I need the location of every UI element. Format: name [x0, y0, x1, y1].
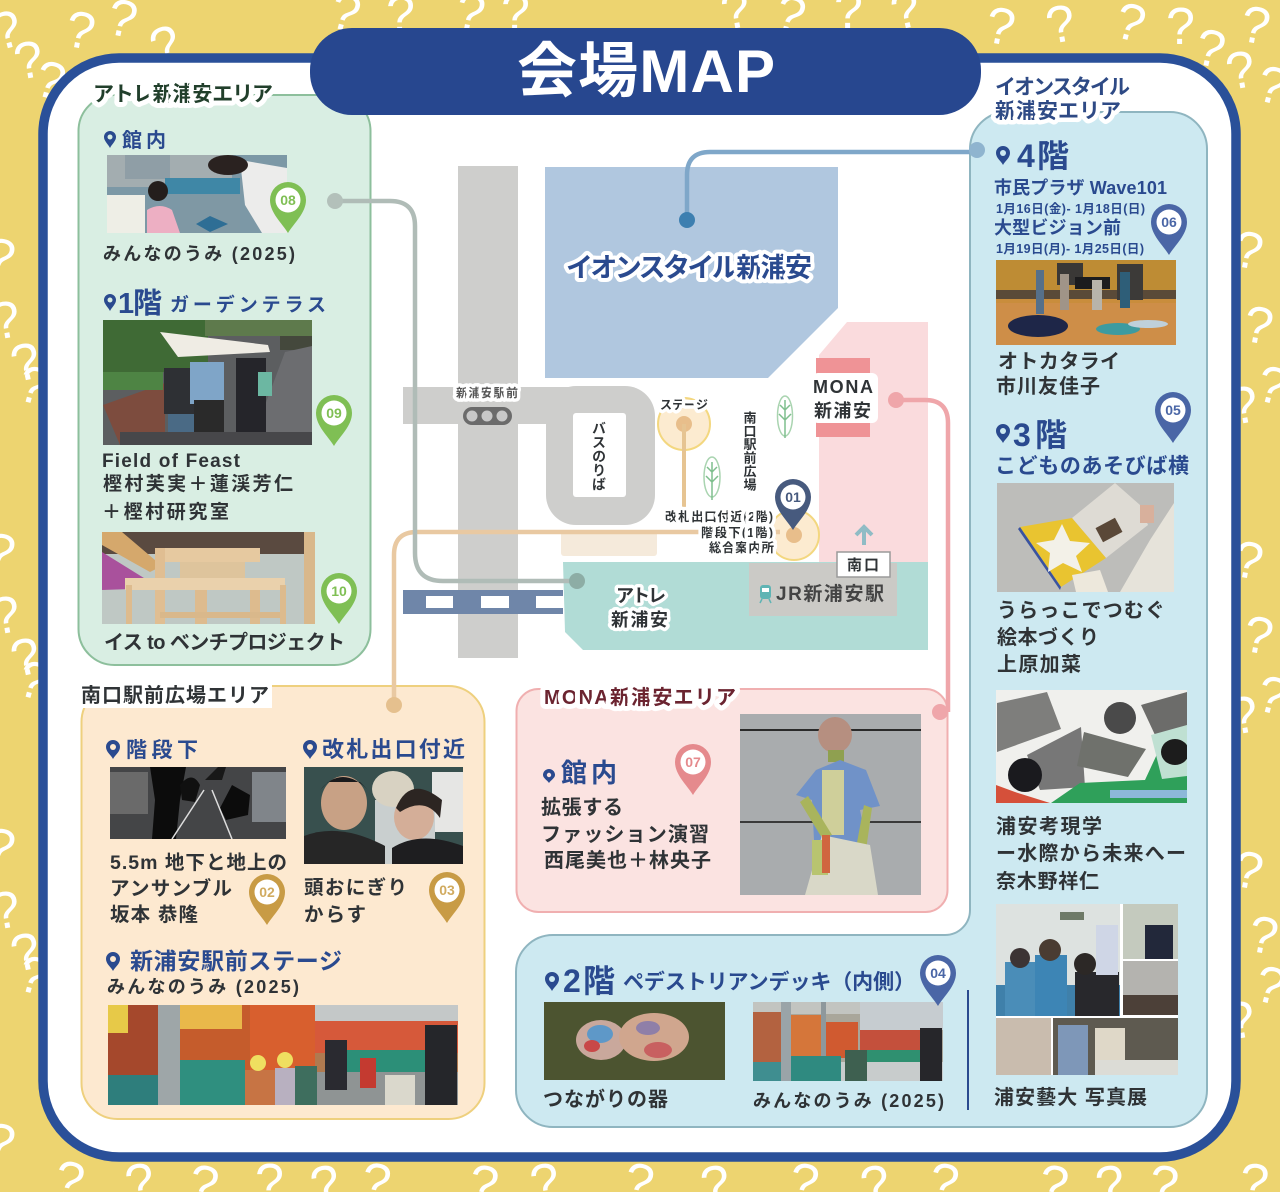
area heading: 南口駅前広場エリア [81, 684, 269, 707]
information labels [665, 509, 774, 555]
divider [967, 990, 969, 1110]
caption: 奈木野祥仁 [996, 870, 1099, 893]
caption: 坂本 恭隆 [110, 904, 198, 926]
area heading: MONA新浦安エリア [544, 686, 736, 709]
bus stop label [573, 413, 626, 497]
pin 04 [920, 955, 956, 1006]
caption: 浦安考現学 [996, 815, 1102, 838]
photo: bowls [544, 1002, 725, 1080]
background question marks: ? [1221, 40, 1260, 102]
caption: 上原加菜 [997, 653, 1081, 676]
atre building [563, 562, 928, 650]
panel: south plaza area [78, 680, 484, 1119]
pin 08: 08 [280, 192, 296, 208]
title banner [310, 28, 981, 115]
caption: アンサンブル [110, 877, 232, 900]
photo: otokatarai [996, 260, 1176, 345]
caption: 浦安藝大 写真展 [994, 1086, 1147, 1109]
venue details: 1月19日(月)- 1月25日(日) [996, 242, 1144, 256]
panel: atre area [78, 83, 370, 665]
caption: からす [304, 904, 366, 926]
pin 02: 02 [259, 884, 275, 900]
pin 03: 03 [439, 882, 455, 898]
caption [110, 852, 287, 926]
floor heading: indoors: 館内 [122, 129, 166, 152]
background question marks: ? [1229, 220, 1268, 282]
plaza patch [561, 530, 657, 556]
pin 06 [1151, 204, 1187, 255]
pin 01: 01 [785, 489, 801, 505]
caption: Field of Feast [102, 451, 241, 472]
background question marks: ? [1190, 18, 1230, 80]
caption [541, 796, 711, 872]
caption [102, 451, 293, 523]
background question marks: ? [1229, 840, 1268, 902]
photo: sea painting deck [753, 1002, 943, 1081]
heading: 3F: 3階 [1013, 417, 1067, 453]
heading: gate: 改札出口付近 [322, 737, 465, 762]
photo: sea painting wall [108, 1005, 458, 1105]
pin 10: 10 [331, 583, 347, 599]
caption: みんなのうみ (2025) [753, 1091, 944, 1111]
connector: stage [682, 424, 686, 511]
train icon [760, 585, 771, 603]
pin 07 [675, 744, 711, 795]
information labels: 改札出口付近(2階) [665, 509, 773, 524]
caption: 絵本づくり [997, 626, 1099, 649]
caption [996, 815, 1186, 893]
background question marks: ? [1224, 375, 1263, 437]
background question marks: ? [9, 30, 48, 92]
caption: オトカタライ [998, 350, 1120, 373]
stage label: ステージ [660, 398, 708, 412]
area heading: アトレ新浦安エリア [93, 83, 273, 106]
heading: 3F: こどものあそびば横 [995, 455, 1189, 478]
pin 10 [321, 573, 357, 624]
map [327, 142, 985, 720]
venue details: 市民プラザ Wave101 [994, 178, 1167, 198]
information labels: 総合案内所 [709, 540, 774, 555]
photo: sea painting [107, 155, 287, 233]
pin 08 [270, 182, 306, 233]
caption: イス to ベンチプロジェクト [104, 631, 345, 654]
floor heading: 1F [104, 288, 326, 320]
vertical road [458, 166, 518, 658]
photo: urayasu archaeology [996, 690, 1189, 803]
connector: mona [888, 392, 948, 720]
atre label: 新浦安 [611, 609, 668, 630]
aeon building [545, 167, 838, 378]
pin 06: 06 [1161, 214, 1177, 230]
tree [704, 457, 720, 500]
heading: stage: 新浦安駅前ステージ [130, 948, 342, 974]
pin 09: 09 [326, 405, 342, 421]
caption [304, 876, 407, 926]
title: 会場MAP [517, 38, 775, 105]
JR station label: JR新浦安駅 [776, 583, 884, 605]
caption: 市川友佳子 [996, 375, 1100, 398]
caption: 樫村芙実＋蓮渓芳仁 [103, 472, 293, 495]
venue details: 大型ビジョン前 [994, 217, 1121, 238]
floor heading: 1F: ガーデンテラス [170, 293, 326, 316]
area heading: 新浦安エリア [995, 100, 1121, 123]
caption [996, 350, 1120, 398]
heading: stairs: 階段下 [126, 739, 198, 762]
background question marks: ? [1224, 685, 1263, 747]
heading: 3F [995, 417, 1189, 478]
aeon label: イオンスタイル新浦安 [566, 253, 812, 283]
mona label: 新浦安 [814, 400, 871, 421]
caption: みんなのうみ (2025) [103, 244, 295, 264]
venue details [994, 178, 1167, 256]
area heading: イオンスタイル [995, 76, 1130, 99]
pin 07: 07 [685, 754, 701, 770]
background question marks: ? [12, 354, 55, 418]
south exit [837, 552, 890, 577]
pin 02 [249, 874, 285, 925]
background question marks: ? [1239, 605, 1278, 667]
heading: indoors: 館内 [561, 758, 617, 788]
caption: 頭おにぎり [304, 876, 407, 899]
photo: rice ball [304, 767, 463, 864]
connector: atre [327, 193, 585, 589]
caption: ＋樫村研究室 [102, 501, 229, 523]
information labels: 階段下(1階) [701, 526, 773, 540]
atre label [611, 586, 668, 630]
background question marks: ? [12, 649, 55, 713]
connector: aeon [679, 142, 985, 228]
caption: 西尾美也＋林央子 [544, 849, 711, 872]
station road label: 新浦安駅前 [456, 385, 518, 400]
panel: mona area [516, 686, 948, 912]
mona label: MONA [813, 377, 873, 397]
mona accents [816, 358, 870, 437]
tree [778, 396, 792, 438]
heading: 4F: 4階 [1017, 138, 1069, 174]
pin 09 [316, 395, 352, 446]
pin 01 [775, 479, 811, 530]
information circle [769, 510, 819, 560]
arrow up [856, 527, 872, 545]
photo: picture book [997, 483, 1174, 592]
photo: urayasu arts collage [996, 904, 1178, 1075]
caption: 5.5m 地下と地上の [110, 852, 287, 874]
caption: ファッション演習 [541, 823, 709, 846]
south exit: 南口 [847, 557, 879, 574]
photo: field of feast [103, 320, 312, 445]
background question marks: ? [12, 944, 55, 1008]
heading: 2F: ペデストリアンデッキ（内側） [623, 970, 915, 994]
background question marks: ? [5, 627, 46, 689]
photo: fashion [740, 714, 921, 895]
background question marks: ? [5, 332, 46, 394]
atre label: アトレ [616, 586, 666, 606]
pin 05: 05 [1165, 402, 1181, 418]
pin 05 [1155, 392, 1191, 443]
caption: ー水際から未来へー [996, 842, 1186, 865]
railway [403, 590, 563, 614]
bus loop [546, 386, 655, 525]
photo: ensemble [110, 767, 286, 839]
area heading [995, 76, 1130, 123]
connector: south plaza [386, 532, 780, 713]
floor heading: indoors [104, 129, 166, 152]
background question marks: ? [142, 14, 189, 78]
stage circle [658, 398, 710, 450]
pin 04: 04 [930, 965, 946, 981]
heading: 2F [545, 963, 915, 999]
background question marks: ? [1221, 990, 1260, 1052]
background question marks: ? [61, 0, 100, 62]
bus stop label: バスのりば [591, 421, 607, 491]
venue details: 1月16日(金)- 1月18日(日) [996, 201, 1145, 216]
plaza vertical label: 南口駅前広場 [742, 411, 756, 492]
background question marks: ? [5, 922, 46, 984]
floor heading: 1F: 1階 [118, 288, 162, 320]
caption: うらっこでつむぐ [997, 599, 1165, 622]
mona building [819, 322, 928, 565]
pin 03 [429, 872, 465, 923]
caption: つながりの器 [543, 1087, 668, 1111]
traffic signal [463, 407, 512, 425]
panel: aeon area [516, 76, 1207, 1127]
background question marks: ? [29, 49, 72, 113]
caption [997, 599, 1165, 676]
mona label [812, 373, 878, 423]
background question marks: ? [1229, 530, 1268, 592]
background question marks: ? [1239, 295, 1278, 357]
heading: 2F: 2階 [563, 963, 615, 999]
caption: 拡張する [541, 796, 623, 819]
jr station [749, 563, 897, 616]
horizontal road [403, 387, 575, 424]
caption: みんなのうみ (2025) [107, 977, 299, 997]
photo: bench [102, 532, 315, 624]
